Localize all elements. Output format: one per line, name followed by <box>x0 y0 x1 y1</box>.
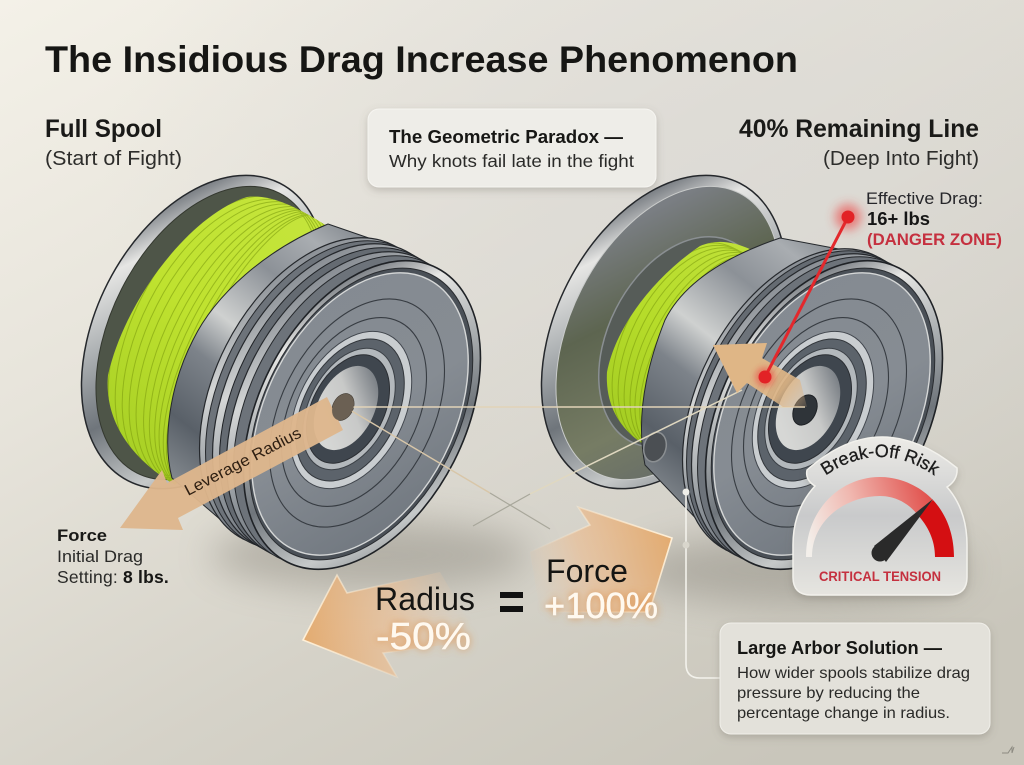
equation: radius -50%: -50% <box>376 616 471 658</box>
grooves <box>151 198 519 604</box>
arrow: shortened radius <box>713 343 807 407</box>
panel: large arbor solution: percentage change in radius. <box>737 705 950 722</box>
gauge title: Break-Off Risk <box>820 444 940 476</box>
label: effective drag <box>866 190 1002 249</box>
front face <box>195 221 529 609</box>
center hole <box>328 390 358 424</box>
panel: geometric paradox: Why knots fail late in the fight <box>389 151 634 171</box>
label: force initial drag <box>57 527 169 587</box>
heading: 40% remaining line: 40% Remaining Line <box>739 115 979 143</box>
panel: geometric paradox <box>368 109 656 187</box>
label: force initial drag: Initial Drag <box>57 548 143 566</box>
back flange, exposed <box>492 134 836 530</box>
gauge needle <box>872 499 933 562</box>
panel: large arbor solution: How wider spools stabilize drag <box>737 665 970 682</box>
arrow: leverage radius: Leverage Radius <box>182 425 304 500</box>
label: effective drag: Effective Drag: <box>866 190 983 208</box>
panel: large arbor solution: Large Arbor Solution — <box>737 638 942 658</box>
heading: 40% remaining line <box>739 115 979 170</box>
label: force initial drag: Force <box>57 527 107 545</box>
left spool: full line <box>80 174 482 570</box>
equation: radius -50%: Radius <box>375 581 475 617</box>
heading: full spool: Full Spool <box>45 115 162 143</box>
gauge: break-off risk <box>790 436 970 601</box>
equation: force +100%: +100% <box>544 585 658 626</box>
equals sign <box>500 592 523 612</box>
label: effective drag: 16+ lbs <box>867 209 930 229</box>
gauge critical zone <box>917 500 954 557</box>
radius construction lines <box>345 265 805 580</box>
back flange <box>32 134 376 530</box>
arrow: radius decrease <box>303 572 480 677</box>
label: effective drag: (DANGER ZONE) <box>867 231 1002 249</box>
panel: large arbor solution <box>720 623 990 734</box>
small watermark mark <box>1002 747 1014 753</box>
label: force initial drag: Setting: 8 lbs. <box>57 567 169 587</box>
green fishing line, full <box>108 196 326 482</box>
heading: full spool: (Start of Fight) <box>45 148 182 170</box>
connector to large arbor panel <box>682 488 720 678</box>
equation: force +100%: Force <box>546 553 628 589</box>
line clip knob <box>640 430 670 464</box>
red danger pointer <box>755 204 861 387</box>
grooves <box>634 209 983 605</box>
panel: large arbor solution: pressure by reducing the <box>737 685 920 702</box>
arrow: force increase <box>530 507 672 612</box>
heading: 40% remaining line: (Deep Into Fight) <box>823 148 979 170</box>
panel: geometric paradox: The Geometric Paradox — <box>389 127 623 147</box>
equation: force +100% <box>544 553 658 626</box>
gauge scale arc <box>806 477 933 557</box>
arrow: leverage radius <box>120 390 358 530</box>
equation: radius -50% <box>375 581 475 658</box>
right spool: 40% remaining <box>540 174 944 570</box>
green fishing line, depleted <box>606 242 750 443</box>
front face <box>657 221 991 609</box>
heading: full spool <box>45 115 182 170</box>
title: The Insidious Drag Increase Phenomenon <box>45 39 798 80</box>
center hole <box>788 391 822 429</box>
metal spool body <box>168 224 395 539</box>
metal spool body <box>642 238 876 550</box>
gauge caption: CRITICAL TENSION <box>819 569 941 584</box>
